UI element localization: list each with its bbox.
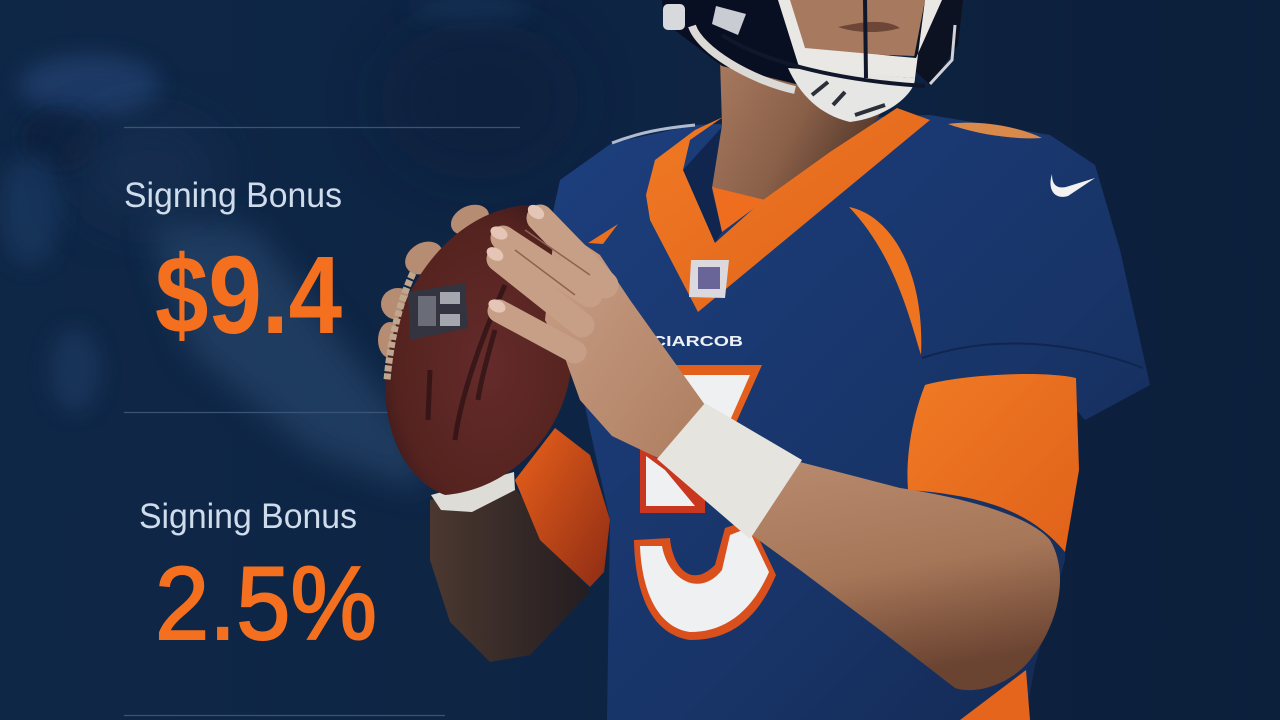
right helmet trim — [930, 25, 955, 84]
jersey torso — [548, 115, 1150, 720]
ball laces — [387, 273, 413, 380]
white jaw strap — [778, 0, 942, 78]
left wristband — [431, 472, 515, 512]
ball seams — [428, 285, 505, 440]
facemask — [722, 0, 925, 86]
helmet clip — [663, 4, 685, 30]
value: 2.5% — [155, 546, 377, 662]
left hand fingers — [378, 199, 494, 358]
undershirt — [712, 187, 765, 232]
stat: signing bonus percent — [139, 497, 377, 662]
throwing hand — [484, 202, 705, 458]
light beam — [150, 225, 425, 490]
white shoulder piping — [612, 125, 695, 143]
value: $9.4 — [155, 234, 342, 357]
label: Signing Bonus — [139, 497, 357, 536]
fingers — [499, 218, 605, 352]
orange collar — [646, 108, 930, 312]
divider lines — [124, 128, 520, 716]
shoulder number fragment — [948, 123, 1042, 138]
team wordmark: CIARCOB — [652, 333, 743, 350]
inner collar shadow — [683, 127, 722, 243]
label: Signing Bonus — [124, 176, 342, 215]
helmet lower trim — [692, 26, 795, 90]
nike swoosh — [1050, 174, 1095, 197]
left forearm — [430, 488, 590, 662]
finger gaps — [515, 230, 590, 295]
orange bottom panel — [960, 670, 1030, 720]
right helmet side — [912, 0, 963, 85]
face — [785, 0, 926, 56]
orange undersleeve left — [515, 428, 610, 587]
blurred stadium crowd — [0, 0, 580, 412]
small orange accent — [588, 224, 618, 244]
ball panel badge — [408, 283, 468, 340]
neck — [712, 60, 895, 203]
mouth — [838, 22, 900, 32]
orange right sleeve — [907, 374, 1079, 552]
stat: signing bonus amount — [124, 176, 342, 357]
jersey number — [634, 365, 776, 640]
quarterback figure — [378, 0, 1150, 720]
fingernails — [484, 202, 547, 315]
chin cup marks — [812, 82, 885, 115]
back of hand — [545, 225, 705, 458]
chin cup — [788, 68, 915, 122]
collar badge — [689, 260, 729, 298]
right forearm — [745, 462, 1060, 690]
jersey sleeve hem — [922, 343, 1143, 368]
helmet shell — [662, 0, 800, 85]
helmet logo — [712, 6, 746, 35]
chest stripe — [849, 207, 921, 355]
helmet — [662, 0, 963, 122]
football — [385, 205, 572, 495]
right wristband — [657, 403, 802, 539]
